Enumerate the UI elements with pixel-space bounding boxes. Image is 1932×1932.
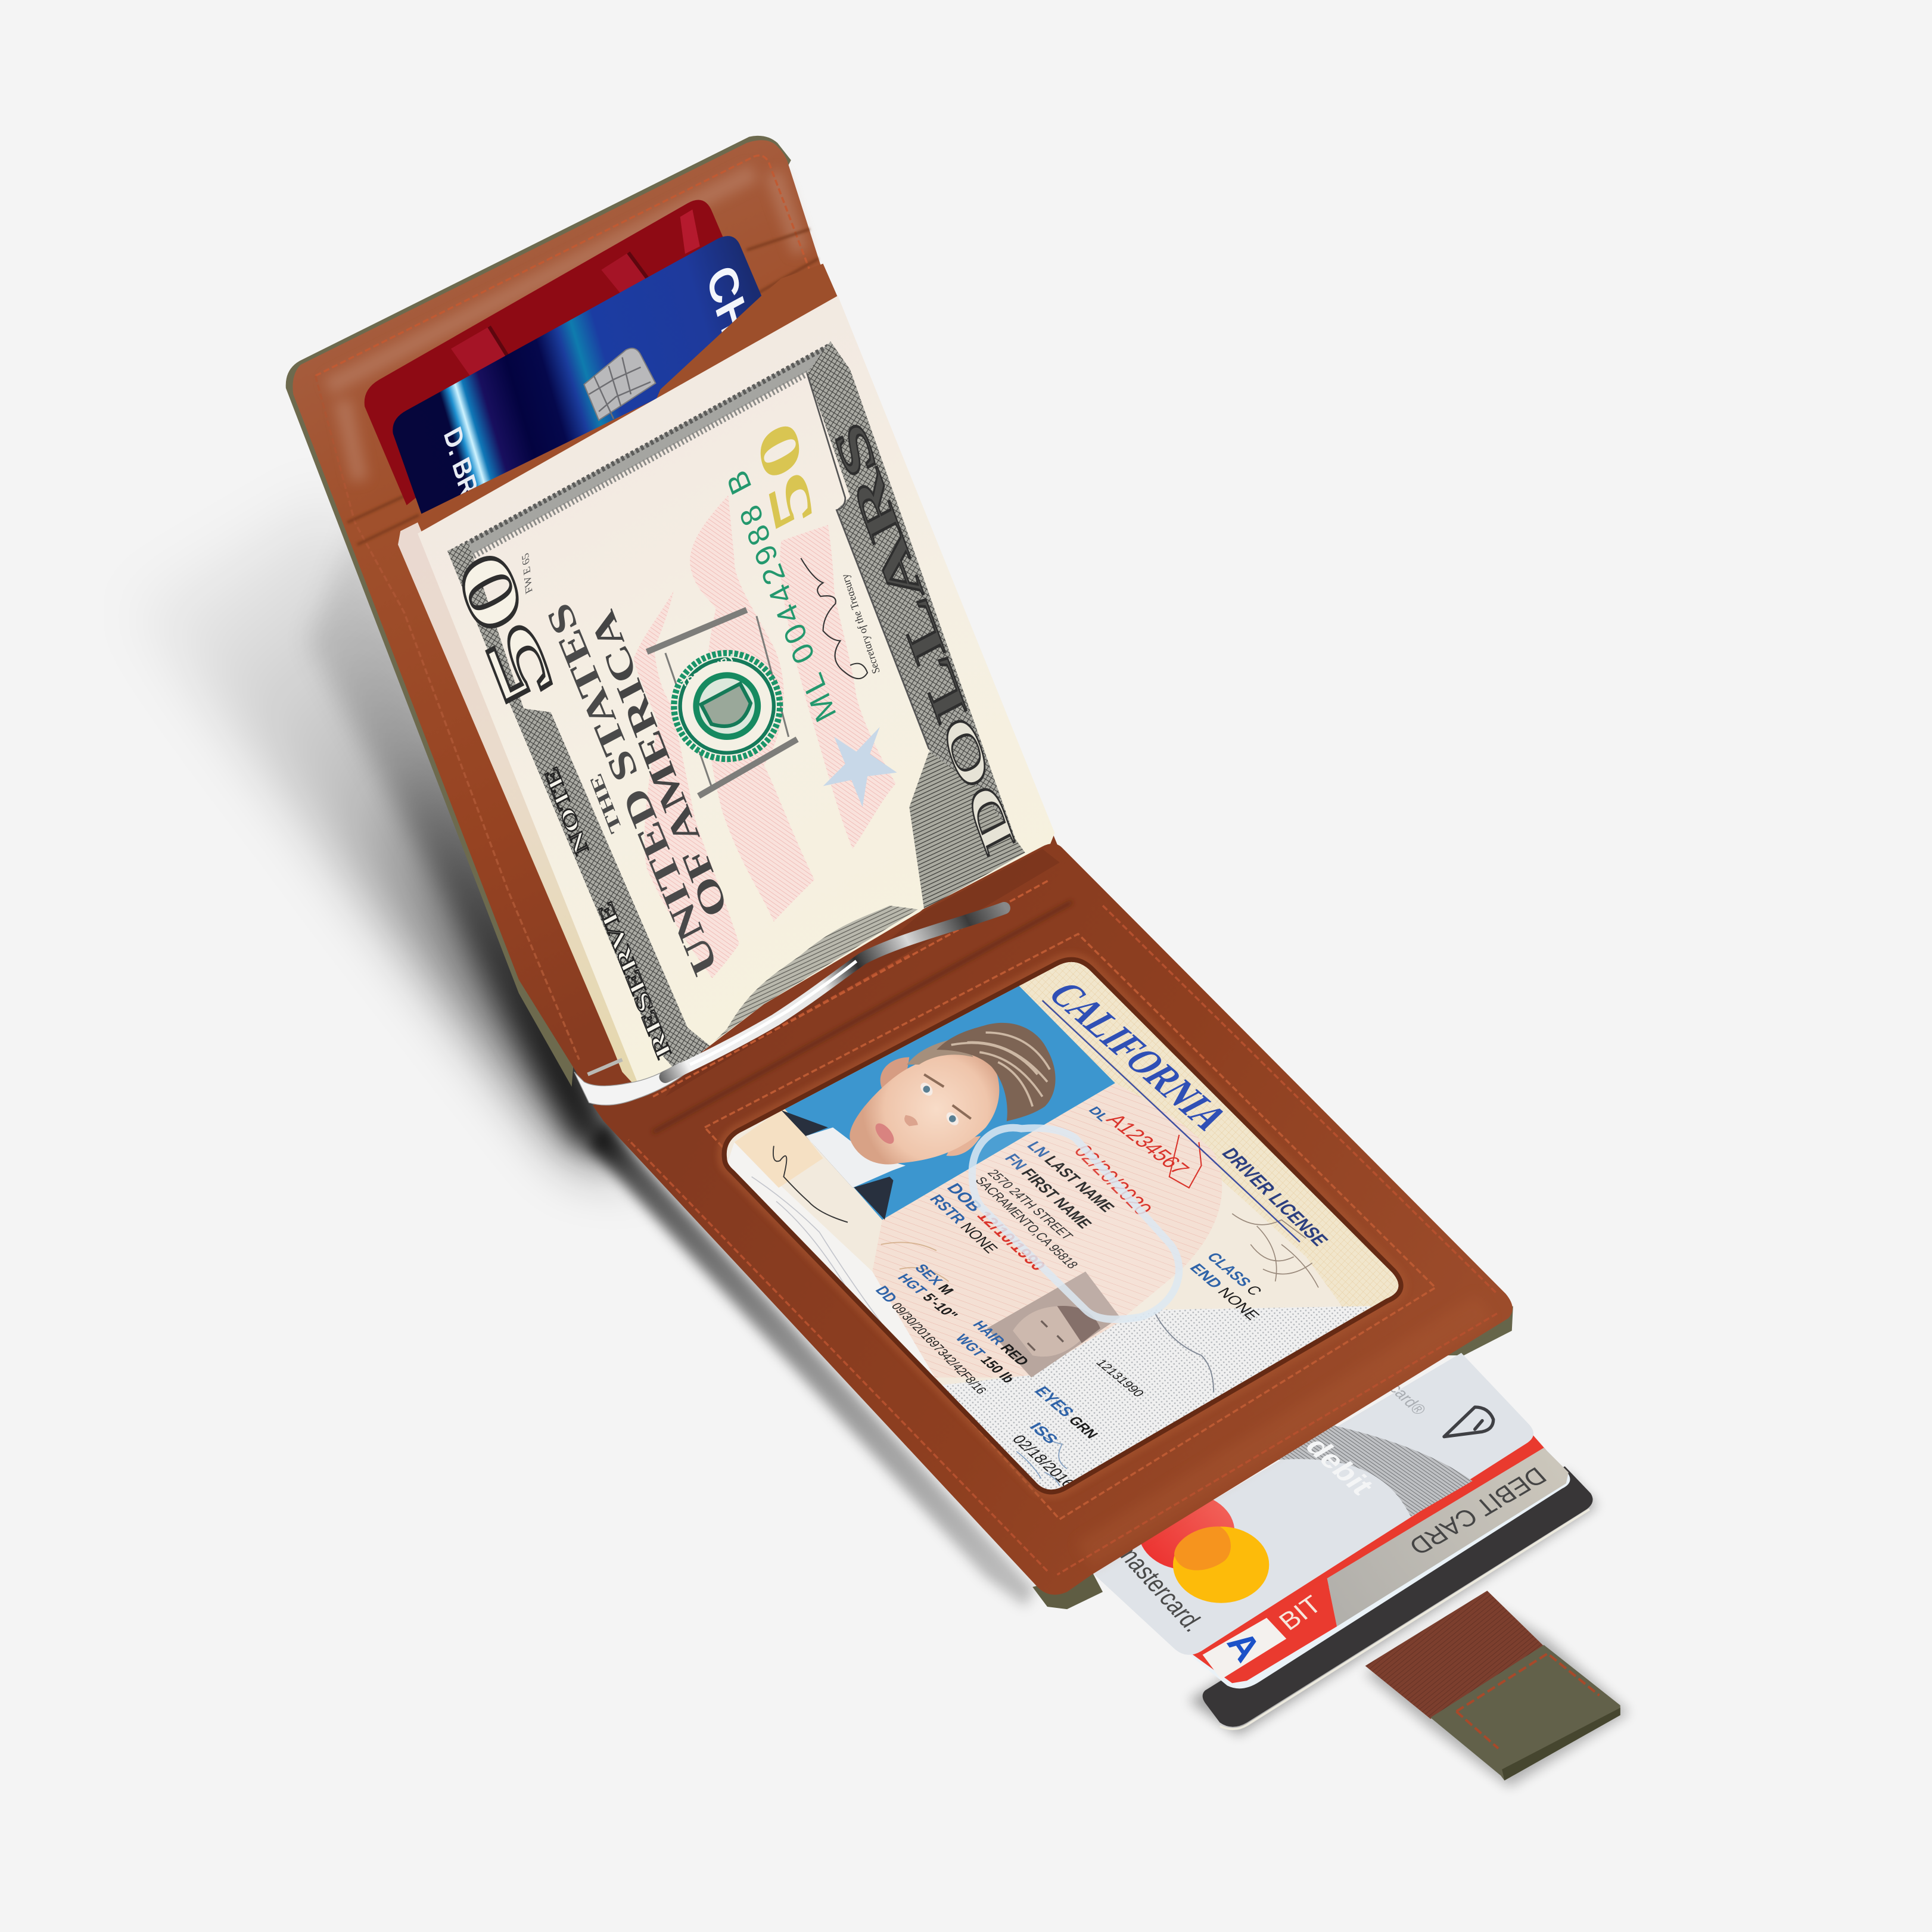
address line one: 2570 24TH STREET [984, 1167, 1077, 1242]
left engraved band [447, 542, 727, 1084]
upper leather panel [293, 140, 1060, 1109]
peach signature tab [735, 1107, 823, 1188]
pink ribbons [633, 495, 896, 978]
pink guilloche [872, 1083, 1222, 1377]
dotted security field [932, 1306, 1373, 1497]
wallet cast shadow [129, 493, 1035, 1607]
shaved side hair [907, 1037, 973, 1065]
right engraved band [807, 341, 1021, 863]
OF AMERICA: OF AMERICA [583, 604, 736, 925]
black card [1189, 1466, 1597, 1735]
endorsements: END NONE [1186, 1261, 1264, 1323]
eyes: EYES GRN [1030, 1384, 1103, 1441]
face [850, 1051, 999, 1165]
chip [584, 349, 655, 420]
card base [690, 937, 1429, 1516]
right ear [946, 1136, 981, 1156]
grey band with label [1327, 1448, 1569, 1626]
star [823, 727, 897, 807]
pocket lines [347, 229, 818, 545]
card text: CHASE [698, 257, 785, 434]
top stitching [315, 155, 819, 376]
clip arm [665, 908, 1004, 1077]
lower leather panel [593, 844, 1513, 1595]
guilloche swoosh [1252, 1423, 1473, 1517]
mastercard wordmark: mastercard. [1110, 1539, 1210, 1637]
hair [937, 1023, 1056, 1121]
restrictions: RSTR NONE [926, 1192, 1001, 1256]
serial number: ML 00442988 B [720, 465, 842, 727]
suit [781, 1110, 893, 1220]
shirt [806, 1127, 906, 1188]
photo background [783, 981, 1115, 1220]
NOTE: NOTE [540, 763, 593, 859]
debit wordmark: debit [1298, 1433, 1381, 1499]
leather sheen [328, 173, 801, 481]
CALIFORNIA: CALIFORNIA [1037, 976, 1239, 1137]
card text [444, 268, 745, 494]
blue card in upper pocket [393, 236, 761, 514]
olive end [1430, 1645, 1620, 1781]
DOLLARS: DOLLARS [823, 414, 1025, 862]
treasury seal [655, 634, 799, 777]
corner 50: 50 [438, 537, 570, 720]
holder signature [773, 1146, 848, 1222]
top scalloped border [451, 345, 833, 564]
hinge stitching [653, 880, 1050, 1097]
clip pivot pin [588, 1060, 622, 1075]
lower right engraving [909, 752, 1025, 909]
wallet olive underside [286, 136, 1513, 1609]
clip highlight [690, 961, 856, 1065]
treasury seal: TREASURY [679, 652, 737, 689]
mastercard circles [1138, 1494, 1269, 1603]
left pale field [727, 1142, 1047, 1497]
DL number: A1234567 [1101, 1110, 1195, 1178]
issue date: 02/18/2016 [1009, 1432, 1079, 1491]
strap [1365, 1591, 1544, 1719]
clip white loop [574, 1062, 687, 1105]
pull tab [1365, 1591, 1629, 1787]
hair colour: HAIR RED [969, 1318, 1032, 1368]
plate code: FW E 65 [520, 550, 535, 596]
DL label: DL [1085, 1105, 1113, 1124]
shaded hinge strip [665, 849, 1060, 1097]
bank logo [1444, 1407, 1494, 1437]
outer stitching [629, 906, 1497, 1575]
bottom flap highlight [1084, 1306, 1485, 1555]
grey band with label: DEBIT CARD [1403, 1462, 1552, 1560]
class: CLASS C [1203, 1250, 1266, 1298]
THE: THE [585, 770, 626, 837]
left ear [881, 1057, 909, 1094]
small portrait [987, 1271, 1120, 1377]
card wordmark: card® [1385, 1381, 1430, 1418]
portrait [850, 1023, 1056, 1165]
audit number: 12131990 [1093, 1357, 1147, 1399]
card text: D. BROWN [438, 422, 500, 559]
map and contour lines [752, 1135, 1318, 1486]
date of birth: DOB 12/10/1990 [942, 1181, 1049, 1274]
BIT label: BIT [1274, 1591, 1327, 1636]
bank note stack edge [398, 522, 647, 1089]
window stitching [705, 934, 1435, 1519]
sex: SEX M [911, 1262, 957, 1297]
expiry date: 02/20/2020 [1069, 1141, 1158, 1219]
pillars behind seal [647, 610, 797, 796]
red card in upper pocket [365, 200, 727, 505]
left stitching [315, 376, 579, 1060]
gold 50: 50 [745, 410, 825, 543]
secretary caption: Secretary of the Treasury [839, 571, 882, 676]
clear plastic oval [972, 1128, 1179, 1320]
fold crease [653, 902, 1072, 1133]
red and grey debit card [1171, 1429, 1570, 1688]
cream grid top strip [1014, 949, 1411, 1324]
first name: FN FIRST NAME [1001, 1151, 1096, 1231]
treasurer signature [801, 558, 867, 679]
driver license [690, 937, 1429, 1516]
nose [904, 1115, 918, 1126]
silver debit card [1091, 1353, 1533, 1655]
lips [872, 1120, 897, 1147]
issuer label: ISS [1026, 1420, 1062, 1446]
weight: WGT 150 lb [952, 1332, 1018, 1385]
eyes [918, 1081, 935, 1098]
header rule [1043, 1000, 1300, 1242]
white logo box: A [1219, 1624, 1268, 1669]
money clip [574, 908, 1004, 1105]
address line two: SACRAMENTO,CA 95818 [972, 1174, 1082, 1271]
height: HGT 5'-10" [894, 1272, 961, 1321]
DRIVER LICENSE: DRIVER LICENSE [1217, 1145, 1333, 1249]
brows [924, 1075, 971, 1119]
crumpled engraving at fold [715, 906, 918, 1041]
paper [418, 295, 1054, 1084]
leather pocket strip [653, 264, 841, 407]
clip rivet stitching [782, 954, 911, 1025]
ID window frame [727, 962, 1398, 1489]
UNITED STATES: UNITED STATES [539, 596, 726, 982]
white logo box [1203, 1618, 1286, 1679]
last name: LN LAST NAME [1023, 1139, 1119, 1214]
portrait-frame line [807, 374, 929, 749]
RESERVE: RESERVE [593, 897, 676, 1062]
document discriminator: DD 09/30/201697342/42F8/16 [872, 1283, 992, 1396]
fifty dollar bill [418, 295, 1054, 1084]
